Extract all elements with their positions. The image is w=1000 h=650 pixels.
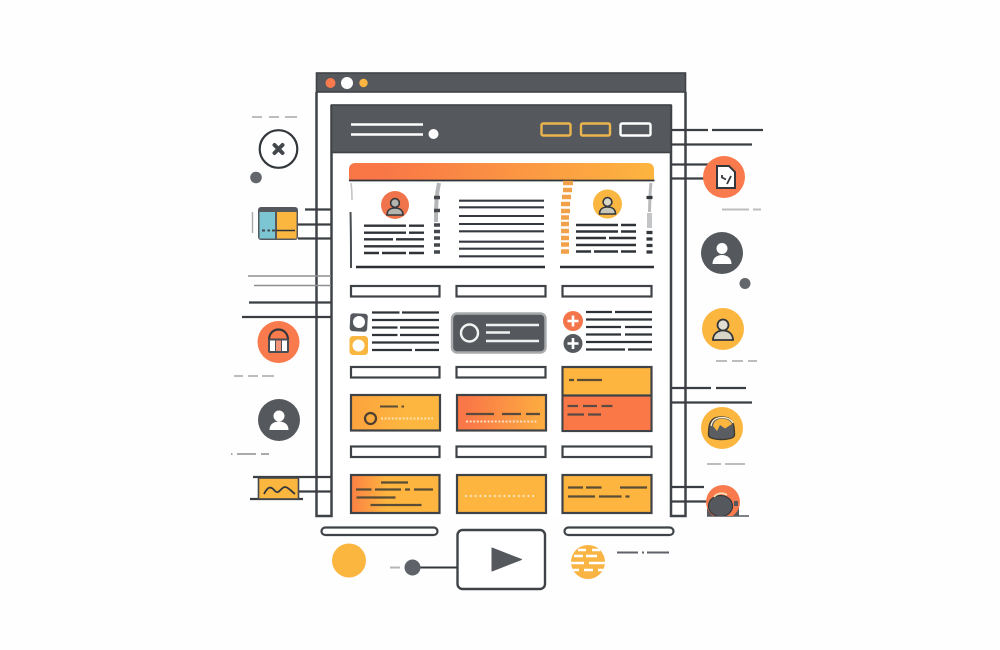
left footer pill	[322, 528, 438, 535]
icon: wave box	[258, 478, 298, 499]
caption dashes left	[231, 117, 297, 454]
feature list right	[563, 311, 652, 353]
title bar	[316, 73, 686, 92]
icon: yellow circle	[332, 544, 366, 578]
profile card right	[576, 183, 652, 252]
caption dashes right	[707, 210, 761, 464]
small vertical tick	[252, 212, 254, 233]
profile card left	[364, 183, 440, 253]
card: dotted line	[457, 475, 546, 513]
centre text block	[459, 201, 544, 256]
icon: orange helmet badge	[706, 485, 740, 519]
section title bars row 3	[351, 446, 652, 457]
right footer pill	[564, 528, 674, 535]
icon: close circle	[260, 130, 297, 168]
centre feature card	[452, 314, 546, 352]
connector with node	[390, 560, 457, 576]
page header bar	[332, 105, 671, 152]
icon: grey avatar left	[258, 399, 300, 441]
icon: split tile	[258, 207, 298, 240]
orange dashed column	[561, 183, 573, 252]
icon: orange document	[703, 156, 745, 198]
card: yellow with ring	[351, 395, 440, 430]
side columns	[316, 92, 686, 516]
card: orange gradient	[457, 395, 546, 430]
grey dot right	[740, 278, 750, 289]
card: dashes	[562, 475, 652, 513]
browser window frame	[316, 73, 686, 516]
icon: orange lock	[258, 321, 300, 363]
stacked card	[562, 367, 652, 431]
section title bars row 1	[351, 286, 652, 296]
left edge stroke	[351, 183, 352, 200]
video player	[458, 530, 545, 589]
dashes beside striped circle	[617, 552, 669, 554]
icon: grey avatar right	[701, 232, 743, 274]
icon: yellow avatar	[702, 308, 744, 350]
feature list left	[350, 312, 439, 355]
grey dot	[250, 172, 262, 183]
left connector lines	[242, 210, 331, 499]
right connector lines	[671, 130, 763, 516]
icon: striped circle	[571, 545, 606, 579]
hero panel	[349, 163, 654, 268]
section title bars row 2	[351, 367, 546, 378]
icon: yellow landscape badge	[701, 407, 743, 449]
gradient banner	[349, 163, 654, 180]
card: text lines	[351, 475, 440, 513]
